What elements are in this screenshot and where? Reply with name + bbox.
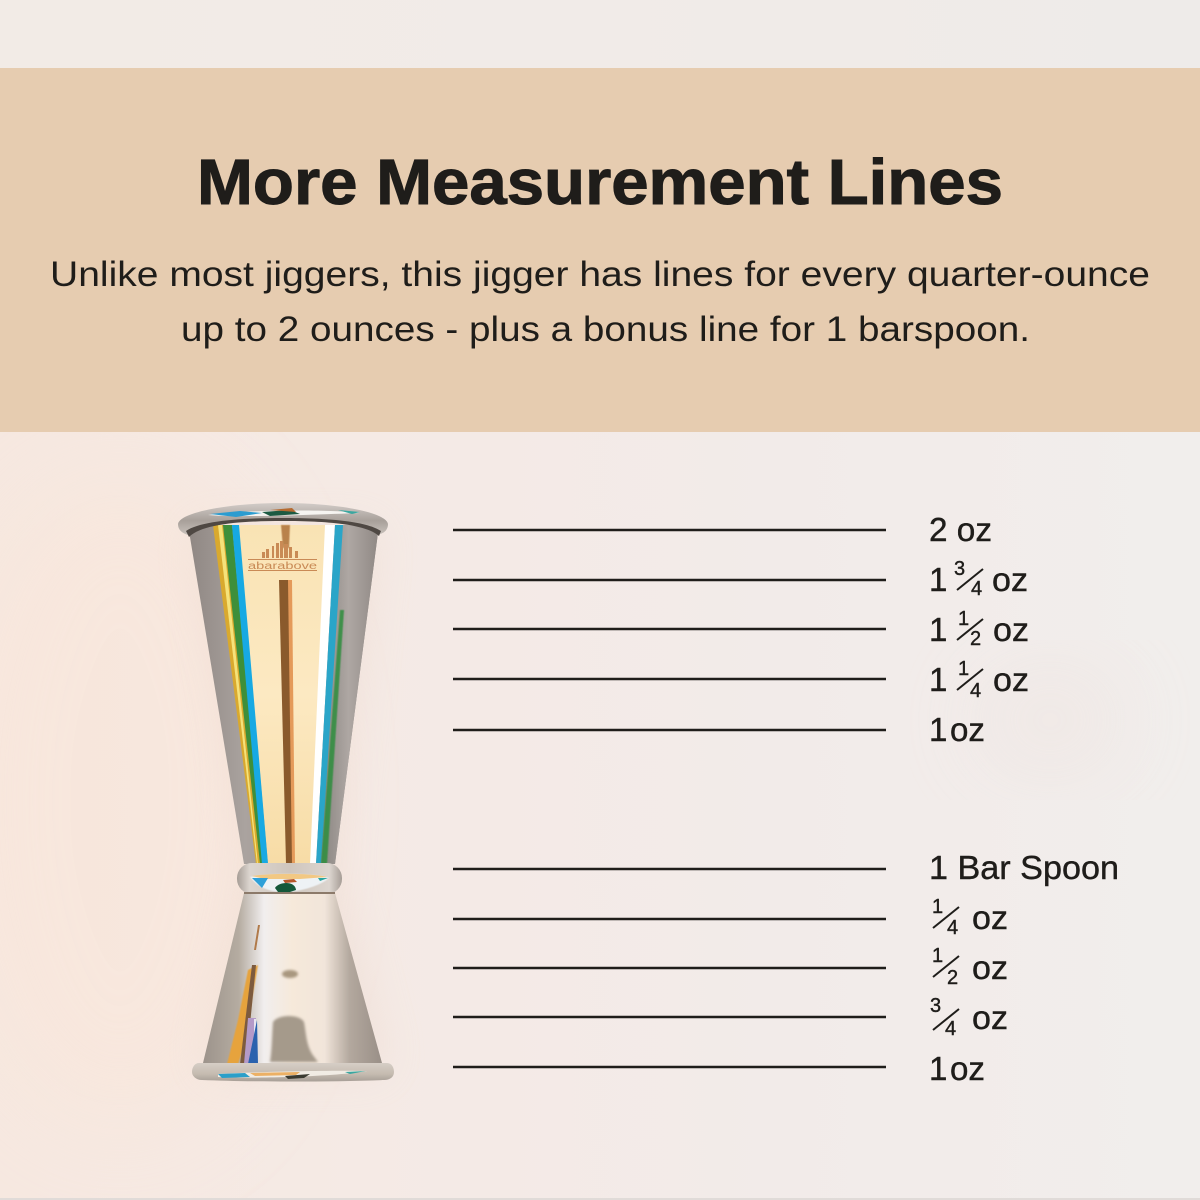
measurement lines: large cup <box>453 530 886 730</box>
label: 3/4 oz: oz <box>972 999 1008 1036</box>
label: 1/2 oz <box>932 945 1008 989</box>
label: 3/4 oz: 4 <box>945 1018 956 1040</box>
label: 1 1/4 oz <box>929 658 1029 702</box>
brand logo engraving: abarabove <box>248 561 318 572</box>
label: 1 oz bottom: 1 <box>929 1050 947 1087</box>
label: 1 1/4 oz: 1 <box>929 661 947 698</box>
lower small cup <box>203 893 382 1064</box>
icon: double jigger <box>178 503 394 1082</box>
label: 1/2 oz: 1 <box>932 945 943 967</box>
description text <box>50 255 1150 349</box>
label: 1 1/4 oz: 1 <box>958 658 969 680</box>
label: 1/2 oz: 2 <box>947 967 958 989</box>
measurement lines: small cup <box>453 869 886 1067</box>
label: 1 3/4 oz: 4 <box>971 578 982 600</box>
label: 1 1/2 oz: oz <box>993 611 1029 648</box>
label: 1/4 oz: 1 <box>932 896 943 918</box>
top rim <box>178 503 388 537</box>
jigger shadow <box>195 530 385 1070</box>
banner panel <box>0 68 1200 432</box>
brand logo engraving <box>248 541 318 572</box>
label: 1 3/4 oz: 3 <box>954 558 965 580</box>
label: 1 1/2 oz: 2 <box>970 628 981 650</box>
base rim <box>192 1063 394 1082</box>
label: 1 1/4 oz: oz <box>993 661 1029 698</box>
label: 1 oz: 1 <box>929 711 947 748</box>
label: 2 oz: 2 oz <box>929 511 992 548</box>
labels: small cup <box>929 849 1119 1087</box>
label: 1/4 oz: oz <box>972 899 1008 936</box>
label: 1 1/2 oz: 1 <box>929 611 947 648</box>
label: 1 oz bottom: oz <box>950 1050 985 1087</box>
labels: large cup <box>929 511 1029 748</box>
label: 1 oz bottom <box>929 1050 985 1087</box>
label: 1/4 oz <box>932 896 1008 939</box>
description text: Unlike most jiggers, this jigger has lines for every quarter-ounce <box>50 255 1150 294</box>
label: 1 3/4 oz <box>929 558 1028 600</box>
label: 1 3/4 oz: oz <box>992 561 1028 598</box>
label: 1 1/4 oz: 4 <box>970 680 981 702</box>
label: 1 1/2 oz: 1 <box>958 608 969 630</box>
label: 3/4 oz <box>930 995 1008 1040</box>
description text: up to 2 ounces - plus a bonus line for 1 barspoon. <box>181 310 1030 349</box>
label: 1/2 oz: oz <box>972 949 1008 986</box>
label: 1 3/4 oz: 1 <box>929 561 947 598</box>
label: 1 Bar Spoon: 1 Bar Spoon <box>929 849 1119 886</box>
label: 1 1/2 oz <box>929 608 1029 650</box>
label: 1/4 oz: 4 <box>947 917 958 939</box>
large upper cup <box>188 525 379 864</box>
label: 3/4 oz: 3 <box>930 995 941 1017</box>
label: 1 oz <box>929 711 985 748</box>
title: More Measurement Lines <box>197 146 1003 218</box>
label: 1 oz: oz <box>950 711 985 748</box>
middle collar <box>237 863 342 894</box>
